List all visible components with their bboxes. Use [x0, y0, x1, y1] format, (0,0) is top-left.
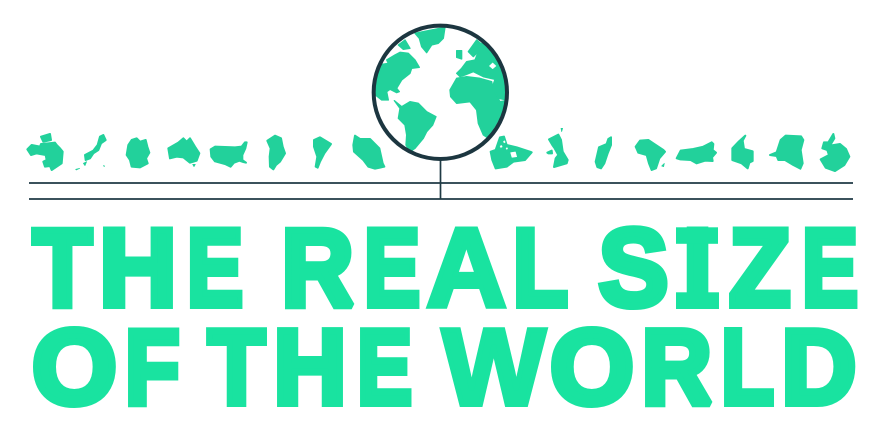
title line 2: R [642, 307, 712, 426]
title line 1: Z [729, 207, 790, 330]
title line 2: W [442, 306, 545, 428]
title line 1: A [426, 205, 506, 331]
title line 1: R [282, 207, 354, 330]
title line 2: L [721, 309, 774, 427]
silhouette: Canada [491, 137, 532, 168]
silhouette: Tanzania [353, 136, 384, 169]
title line 1: H [99, 207, 177, 329]
silhouette: Antarctica [821, 134, 849, 171]
globe magnifier [372, 26, 510, 159]
title line 1 [33, 205, 858, 331]
title line 1: E [802, 207, 858, 329]
silhouette: DR Congo [770, 136, 803, 169]
row of country silhouettes, left of globe [27, 134, 384, 170]
silhouette: Africa [636, 140, 665, 170]
title line 1: L [513, 207, 568, 330]
silhouette: Colombia [732, 136, 753, 168]
silhouette: archipelago country [27, 134, 63, 170]
title line 1: E [364, 207, 420, 329]
title line 1: T [33, 207, 92, 329]
silhouette: USA [211, 142, 247, 167]
title line 2: H [274, 307, 346, 426]
title line 1: I [683, 206, 712, 329]
silhouette: South America [314, 137, 331, 168]
silhouette: United Kingdom [547, 128, 568, 167]
silhouette: Australia [168, 138, 199, 167]
title line 1: S [599, 206, 668, 329]
title line 2: E [357, 308, 412, 427]
title line 2: F [125, 307, 180, 426]
title line 1: E [187, 207, 243, 329]
title line 2: O [550, 307, 634, 426]
silhouette: Russia [677, 142, 716, 163]
silhouette: Japan [76, 135, 106, 170]
row of country silhouettes, right of globe [491, 128, 849, 171]
silhouette: Germany [127, 138, 149, 167]
silhouette: Madagascar [596, 137, 611, 168]
title line 2: T [208, 309, 265, 427]
title line 2 [32, 306, 856, 428]
title line 2: O [32, 308, 117, 426]
title line 2: D [782, 308, 856, 427]
silhouette: Greenland [267, 136, 285, 169]
horizontal baseline rules [29, 158, 853, 199]
